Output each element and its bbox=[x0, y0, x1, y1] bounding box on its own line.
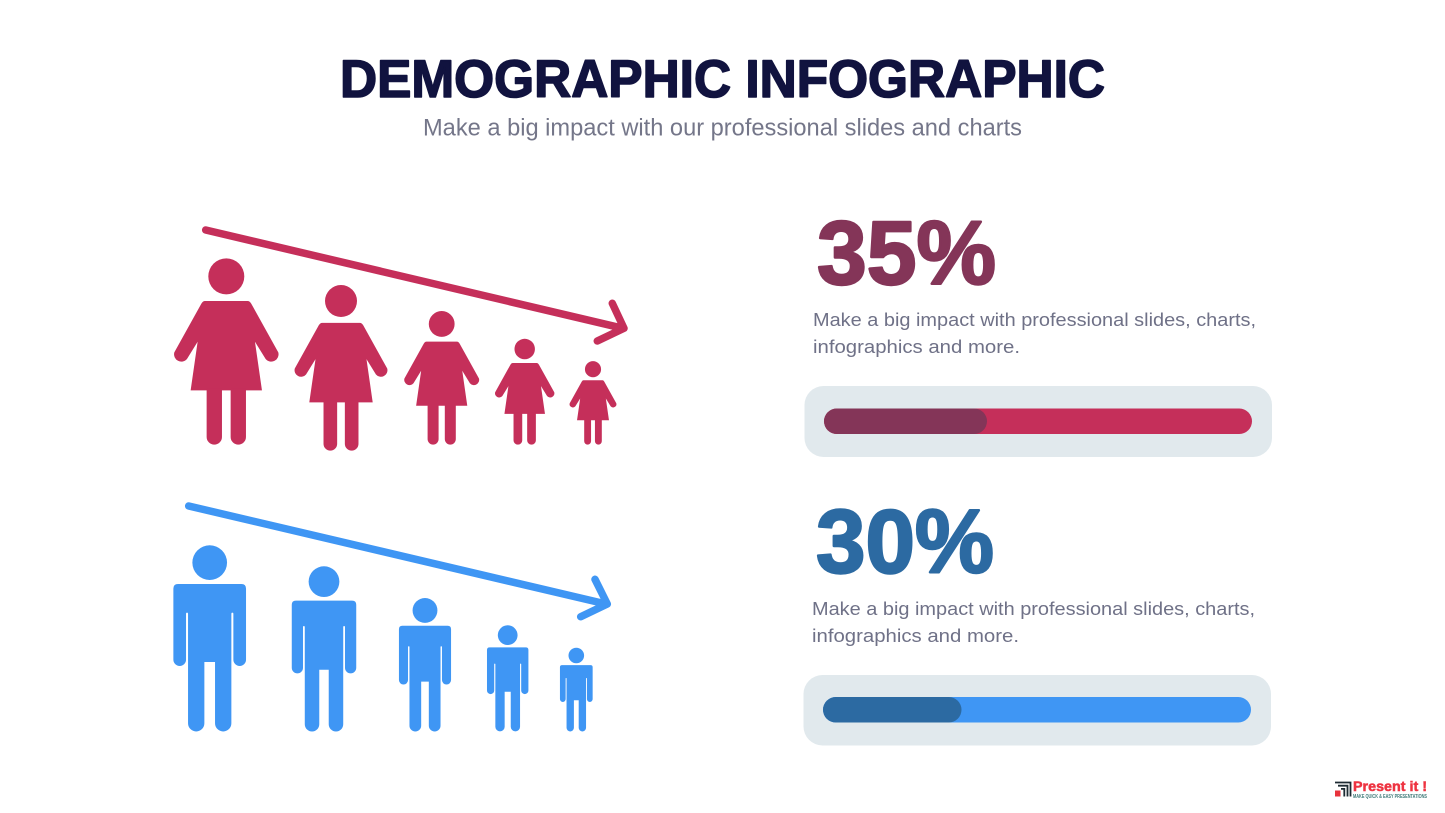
text block: 35% description bbox=[813, 309, 1256, 357]
subtitle: Make a big impact with our professional slides and charts bbox=[423, 114, 1022, 142]
number: 30%: 30% bbox=[816, 492, 994, 592]
text block: 30% description bbox=[812, 598, 1255, 646]
arrow: female decline bbox=[206, 230, 624, 341]
icon: woman 2 bbox=[295, 285, 387, 451]
icon: man 3 bbox=[399, 598, 451, 731]
icon: woman 1 bbox=[174, 258, 279, 445]
icon: man 1 bbox=[173, 545, 246, 731]
icon: man 5 bbox=[560, 648, 593, 731]
icon: logo mark bbox=[1335, 782, 1350, 796]
panel: 30% stat bbox=[804, 492, 1271, 746]
panel: female figures bbox=[174, 230, 624, 451]
icon: man 2 bbox=[292, 566, 356, 731]
number: 35%: 35% bbox=[817, 204, 996, 304]
text block: 35% description: Make a big impact with professional slides, charts, bbox=[813, 309, 1256, 330]
title: DEMOGRAPHIC INFOGRAPHIC bbox=[340, 50, 1105, 109]
text block: 30% description: infographics and more. bbox=[812, 625, 1019, 646]
icon: woman 5 bbox=[570, 361, 616, 445]
arrow: male decline bbox=[189, 506, 607, 617]
panel: 35% stat bbox=[804, 204, 1272, 457]
progress bar: 35% bbox=[804, 386, 1272, 457]
text block: 35% description: infographics and more. bbox=[813, 336, 1020, 357]
icon: man 4 bbox=[487, 625, 528, 731]
text block: 30% description: Make a big impact with professional slides, charts, bbox=[812, 598, 1255, 619]
panel: male figures bbox=[173, 506, 607, 731]
progress bar: 30% bbox=[804, 675, 1271, 746]
logo wordmark: Present it ! bbox=[1353, 779, 1427, 794]
icon: woman 4 bbox=[495, 339, 554, 445]
logo: Present it bbox=[1335, 779, 1427, 800]
icon: woman 3 bbox=[404, 311, 479, 445]
